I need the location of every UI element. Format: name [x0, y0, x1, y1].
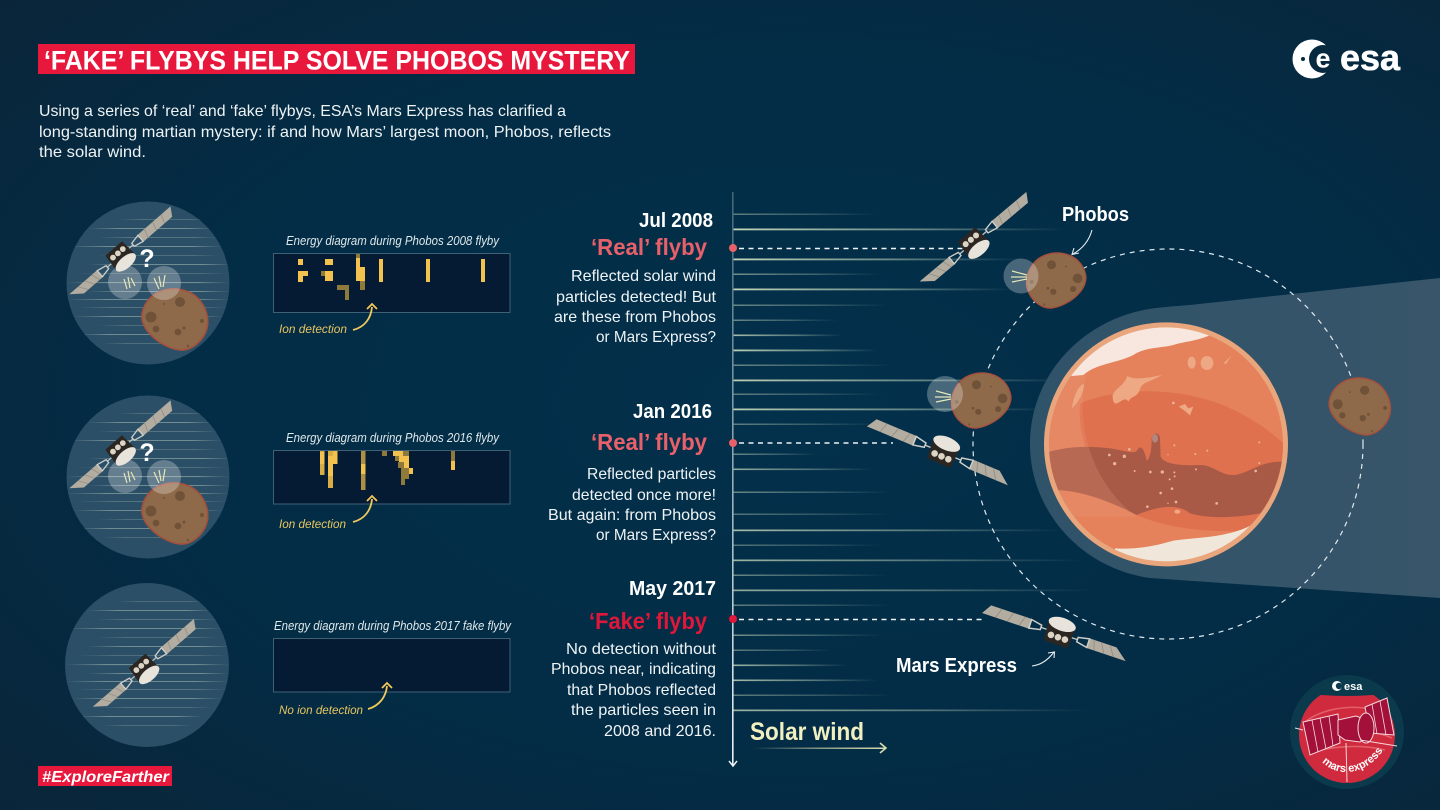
- Phobos orbit: [973, 249, 1363, 639]
- event: May 2017: 2008 and 2016.: [604, 723, 716, 740]
- Mars shadow wake: [1030, 278, 1440, 598]
- energy diagram 2008: [274, 234, 510, 336]
- panel: 2016 flyby close-up: ?: [139, 439, 155, 467]
- panel: 2008 flyby close-up: [66, 202, 233, 364]
- energy diagram 2017: No ion detection: [279, 703, 363, 717]
- event: May 2017: ‘Fake’ flyby: [589, 608, 707, 634]
- energy diagram 2008: Ion detection: [279, 322, 347, 336]
- event: Jan 2016: Reflected particles: [587, 466, 716, 483]
- Mars Express Jul 2008 position: [916, 188, 1039, 296]
- Mars Express May 2017 position: [980, 593, 1132, 667]
- title: ‘FAKE’ FLYBYS HELP SOLVE PHOBOS MYSTERY: [44, 46, 630, 76]
- label: Solar wind with arrow: Solar wind: [750, 718, 864, 746]
- intro text: Using a series of ‘real’ and ‘fake’ flybys, ESA’s Mars Express has clarified a: [39, 103, 566, 120]
- intro text: long-standing martian mystery: if and how Mars’ largest moon, Phobos, reflects: [39, 124, 611, 141]
- label: Phobos: [1062, 204, 1129, 254]
- hashtag: #ExploreFarther: [42, 769, 170, 786]
- event: Jul 2008: [554, 210, 965, 346]
- label: Phobos: Phobos: [1062, 204, 1129, 226]
- mission badge: [1290, 675, 1404, 789]
- event: Jan 2016: ‘Real’ flyby: [591, 429, 707, 455]
- panel: 2017 fake flyby close-up: [65, 583, 232, 747]
- energy diagram 2016: [274, 431, 510, 531]
- energy diagram 2016: Ion detection: [279, 517, 346, 531]
- panel: 2016 flyby close-up: [66, 396, 233, 558]
- event: May 2017: [551, 578, 985, 740]
- energy diagram 2008: Energy diagram during Phobos 2008 flyby: [286, 234, 500, 248]
- mission badge: esa: [1344, 681, 1363, 693]
- event: Jan 2016: But again: from Phobos: [548, 507, 716, 524]
- ESA logo: e: [1315, 44, 1331, 74]
- event: Jul 2008: are these from Phobos: [554, 309, 716, 326]
- event: May 2017: May 2017: [629, 578, 716, 600]
- event: Jul 2008: Reflected solar wind: [571, 268, 716, 285]
- Mars Express Jan 2016 position: [864, 407, 1016, 491]
- Phobos at second position with reflection bubble: [927, 373, 1011, 428]
- event: May 2017: that Phobos reflected: [567, 682, 716, 699]
- ESA logo: esa: [1340, 37, 1401, 78]
- event: May 2017: the particles seen in: [571, 702, 716, 719]
- energy diagram 2017: Energy diagram during Phobos 2017 fake flyby: [274, 619, 512, 633]
- energy diagram 2016: Energy diagram during Phobos 2016 flyby: [286, 431, 500, 445]
- ESA logo: [1292, 37, 1401, 78]
- event: May 2017: No detection without: [566, 641, 717, 658]
- event: Jan 2016: Jan 2016: [633, 401, 712, 423]
- event: Jul 2008: Jul 2008: [639, 210, 713, 232]
- event: Jan 2016: or Mars Express?: [596, 527, 716, 544]
- event: May 2017: Phobos near, indicating: [551, 661, 716, 678]
- event: Jul 2008: particles detected! But: [556, 289, 717, 306]
- solar wind streaks: [733, 214, 1093, 711]
- Phobos on far side of Mars: [1329, 378, 1390, 435]
- intro text: [39, 103, 611, 161]
- energy diagram 2017: [274, 619, 512, 717]
- intro text: the solar wind.: [39, 144, 146, 161]
- event: Jan 2016: [548, 401, 893, 544]
- timeline axis: [729, 192, 737, 766]
- event: Jul 2008: or Mars Express?: [596, 329, 716, 346]
- Mars: [1040, 320, 1300, 573]
- event: Jul 2008: ‘Real’ flyby: [591, 234, 707, 260]
- label: Mars Express: Mars Express: [896, 655, 1017, 677]
- event: Jan 2016: detected once more!: [572, 487, 716, 504]
- panel: 2008 flyby close-up: ?: [139, 245, 155, 273]
- Phobos at first position with reflection bubble: [1004, 253, 1086, 308]
- mission badge: mars express: [1322, 748, 1382, 772]
